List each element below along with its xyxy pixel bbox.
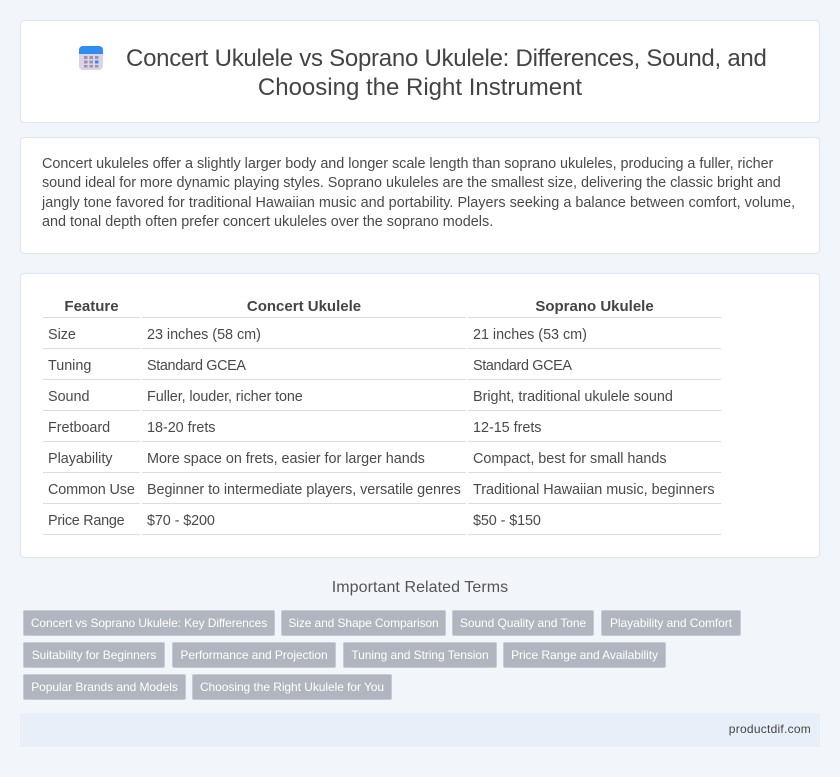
- column headers: Soprano Ukulele: [535, 298, 654, 315]
- related term tags: Concert vs Soprano Ukulele: Key Differences: [31, 616, 267, 630]
- row: playability: [48, 451, 666, 467]
- row: size: 21 inches (53 cm): [473, 327, 587, 343]
- row: size: [48, 327, 587, 343]
- intro text: sound ideal for more dynamic playing styles. Soprano ukuleles are the smallest size, delivering the classic bright and: [42, 175, 781, 191]
- row: sound: Bright, traditional ukulele sound: [473, 389, 673, 405]
- row: playability: Playability: [48, 451, 112, 467]
- column headers: Feature: [64, 298, 119, 315]
- row: fretboard: [48, 420, 541, 436]
- row: tuning: [48, 358, 572, 374]
- related term tags: Price Range and Availability: [511, 648, 658, 662]
- row: playability: Compact, best for small hands: [473, 451, 666, 467]
- row: size: Size: [48, 327, 76, 343]
- table panel: [20, 273, 820, 558]
- title: Choosing the Right Instrument: [258, 74, 582, 101]
- row: common use: Common Use: [48, 482, 135, 498]
- row: price range: Price Range: [48, 513, 124, 529]
- row: fretboard: 12-15 frets: [473, 420, 541, 436]
- related term tags: Suitability for Beginners: [32, 648, 156, 662]
- row: fretboard: 18-20 frets: [147, 420, 215, 436]
- title: [126, 45, 767, 101]
- row: price range: $70 - $200: [147, 513, 215, 529]
- related term tags: Performance and Projection: [180, 648, 328, 662]
- intro text: [42, 156, 795, 230]
- row: tuning: Standard GCEA: [473, 358, 572, 374]
- related term tags: Choosing the Right Ukulele for You: [200, 680, 384, 694]
- related term tags: Tuning and String Tension: [351, 648, 489, 662]
- column headers: [64, 298, 654, 315]
- intro text: and tonal depth often prefer concert ukuleles over the soprano models.: [42, 214, 493, 230]
- row: fretboard: Fretboard: [48, 420, 110, 436]
- row: sound: [48, 389, 673, 405]
- row: common use: Traditional Hawaiian music, beginners: [473, 482, 715, 498]
- row: price range: [48, 513, 541, 529]
- comparison table: [43, 298, 721, 535]
- row: playability: More space on frets, easier for larger hands: [147, 451, 425, 467]
- row: tuning: Tuning: [48, 358, 91, 374]
- intro text: jangly tone favored for traditional Hawaiian music and portability. Players seeking a balance between comfort, volume,: [42, 195, 795, 211]
- related term tags: Playability and Comfort: [610, 616, 732, 630]
- row: size: 23 inches (58 cm): [147, 327, 261, 343]
- icon: calendar: [79, 46, 103, 70]
- column headers: Concert Ukulele: [247, 298, 361, 315]
- row: common use: Beginner to intermediate players, versatile genres: [147, 482, 461, 498]
- row: sound: Sound: [48, 389, 89, 405]
- related term tags: Popular Brands and Models: [31, 680, 178, 694]
- related term tags: [23, 610, 741, 700]
- intro panel: [20, 137, 820, 254]
- header panel: [20, 20, 820, 123]
- row: price range: $50 - $150: [473, 513, 541, 529]
- row: common use: [48, 482, 715, 498]
- footer bar: [20, 713, 820, 747]
- intro text: Concert ukuleles offer a slightly larger body and longer scale length than soprano ukuleles, producing a fuller, richer: [42, 156, 773, 172]
- row: sound: Fuller, louder, richer tone: [147, 389, 303, 405]
- title: Concert Ukulele vs Soprano Ukulele: Differences, Sound, and: [126, 45, 767, 72]
- related terms heading: Important Related Terms: [332, 579, 508, 596]
- related term tags: Size and Shape Comparison: [288, 616, 439, 630]
- footer source: productdif.com: [729, 722, 811, 736]
- related term tags: Sound Quality and Tone: [460, 616, 586, 630]
- row: tuning: Standard GCEA: [147, 358, 246, 374]
